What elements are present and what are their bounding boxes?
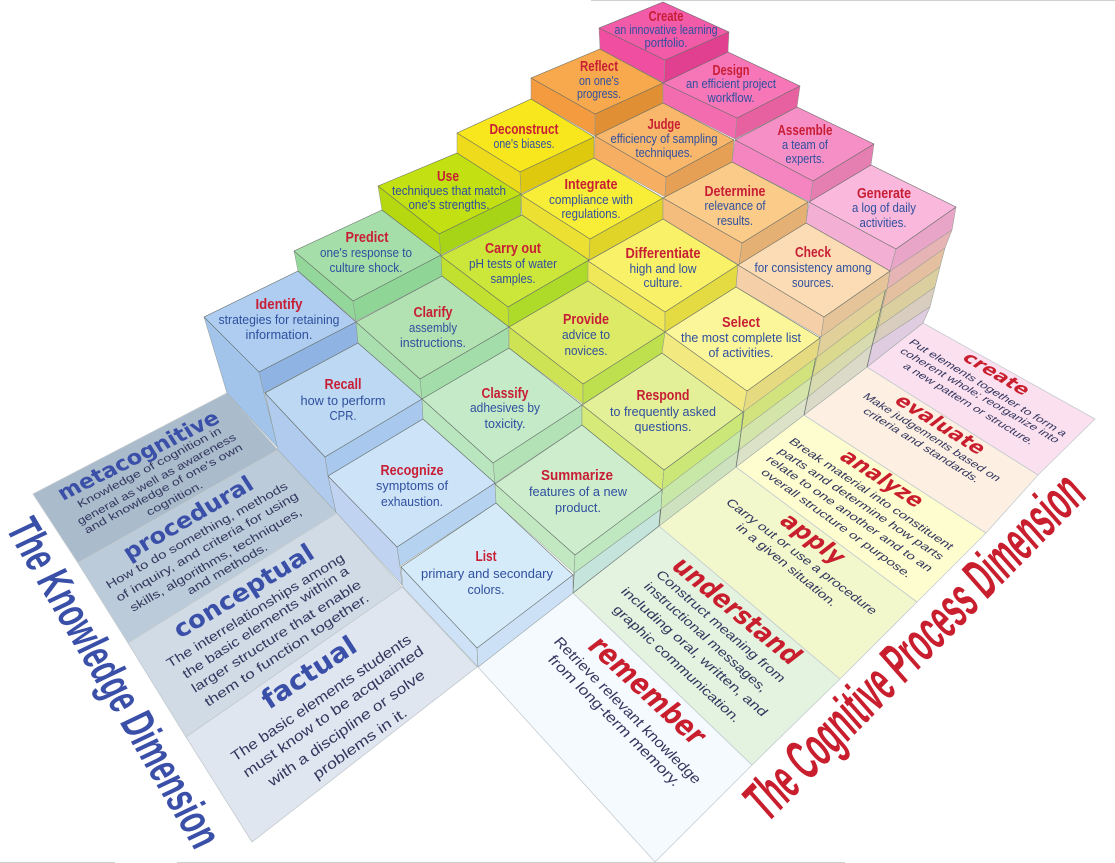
tile: Clarify: Clarify xyxy=(414,305,452,321)
tile: Reflect: on one's xyxy=(579,74,619,88)
panel: procedural: procedural xyxy=(118,470,258,565)
tile: Create: Create xyxy=(648,9,684,25)
panel: evaluate xyxy=(804,367,1038,533)
tile: Provide: Provide xyxy=(563,312,609,328)
tile: Carry out xyxy=(441,215,589,327)
tile: Judge xyxy=(594,103,734,197)
tile: Carry out: pH tests of water xyxy=(469,257,557,271)
tile: Reflect: Reflect xyxy=(580,59,618,75)
panel: create xyxy=(867,323,1095,475)
panel: procedural: of inquiry, and criteria for using xyxy=(113,489,301,604)
panel: analyze: relate to one another and to an xyxy=(763,454,936,574)
panel: cognitive process levels xyxy=(478,323,1095,862)
tile: Provide: novices. xyxy=(564,344,608,358)
tile: Differentiate: culture. xyxy=(644,276,682,290)
tile: Generate xyxy=(806,165,956,271)
tile: List xyxy=(401,503,573,667)
tile: Deconstruct: Deconstruct xyxy=(490,122,559,138)
tile: Use: Use xyxy=(437,169,459,185)
panel: conceptual xyxy=(128,513,402,737)
panel: procedural xyxy=(78,450,337,643)
panel: metacognitive: cognition. xyxy=(144,480,205,518)
tile: Select: the most complete list xyxy=(681,331,802,345)
panel: procedural: How to do something, methods xyxy=(103,479,290,591)
panel: apply xyxy=(659,467,917,679)
tile: Determine: Determine xyxy=(704,184,766,200)
tile: Recall: CPR. xyxy=(330,409,356,423)
tile: Check: sources. xyxy=(792,276,834,290)
tile: Use: one's strengths. xyxy=(408,198,490,212)
tile: Integrate: compliance with xyxy=(549,193,633,207)
tile: Design xyxy=(663,52,800,139)
panel: understand: instructional messages, xyxy=(641,579,772,694)
tile: List: primary and secondary xyxy=(421,567,554,581)
tile: Carry out: samples. xyxy=(490,272,536,286)
panel: conceptual: The interrelationships among xyxy=(164,551,347,670)
panel: metacognitive: Knowledge of cognition in xyxy=(75,426,224,510)
tile: Create xyxy=(599,2,729,83)
panel: remember: Retrieve relevant knowledge xyxy=(550,634,704,787)
tile: Recall: Recall xyxy=(324,377,362,393)
tile: Classify: adhesives by xyxy=(470,401,541,415)
panel: apply: Carry out or use a procedure xyxy=(723,496,881,617)
tile: Select: Select xyxy=(722,315,760,331)
panel: factual: The basic elements students xyxy=(228,631,414,765)
panel: understand xyxy=(573,526,840,765)
tile: Clarify: instructions. xyxy=(400,336,466,350)
tile: Deconstruct: one's biases. xyxy=(494,137,554,151)
tile: Create: an innovative learning xyxy=(614,23,718,37)
tile: Determine: results. xyxy=(717,214,753,228)
tile: Provide: advice to xyxy=(562,328,610,342)
tile: Carry out: Carry out xyxy=(485,241,541,257)
tile: Predict: culture shock. xyxy=(330,261,402,275)
tile: Identify: strategies for retaining xyxy=(218,313,340,327)
panel: analyze: Break material into constituent xyxy=(786,436,958,552)
tile: Create: portfolio. xyxy=(644,36,688,50)
tile: Respond: to frequently asked xyxy=(610,405,716,419)
tile: Use xyxy=(378,153,521,255)
tile: Identify: information. xyxy=(246,328,312,342)
tile: Integrate: Integrate xyxy=(564,177,618,193)
panel: conceptual: the basic elements within a xyxy=(180,563,352,681)
panel: metacognitive xyxy=(33,393,278,563)
tile: Classify xyxy=(422,348,582,483)
panel: metacognitive: and knowledge of one's own xyxy=(82,442,245,536)
panel: factual: problems in it. xyxy=(310,704,410,783)
panel: analyze: analyze xyxy=(833,446,930,512)
tile: Integrate xyxy=(521,158,663,260)
tile: Recognize: symptoms of xyxy=(376,479,449,493)
panel: knowledge dimension levels xyxy=(33,393,477,842)
tile: Select xyxy=(662,287,820,412)
tile: Classify: toxicity. xyxy=(484,417,526,431)
tile: Check: Check xyxy=(795,245,832,261)
panel: apply: in a given situation. xyxy=(733,521,841,609)
tile: Differentiate: Differentiate xyxy=(626,246,700,262)
tile: Provide xyxy=(509,281,665,404)
tile: Assemble: a team of xyxy=(782,138,828,152)
tile: Respond: questions. xyxy=(634,420,692,434)
panel: understand: including oral, written, and xyxy=(618,584,772,719)
tile: Use: techniques that match xyxy=(392,184,506,198)
panel: understand: understand xyxy=(664,552,809,670)
panel: understand: Construct meaning from xyxy=(653,567,790,685)
tile: Deconstruct xyxy=(457,99,594,194)
tile: List: List xyxy=(476,549,497,565)
panel: conceptual: them to function together. xyxy=(202,590,372,709)
tile: Recognize xyxy=(328,419,496,585)
tile: Predict xyxy=(294,210,442,321)
panel: conceptual: conceptual xyxy=(168,538,320,644)
tile: Generate: a log of daily xyxy=(852,201,917,215)
stair column: lower bands below the right edge xyxy=(573,230,952,593)
tile: Design: workflow. xyxy=(707,91,754,105)
tile: Respond xyxy=(582,353,743,490)
tile: Summarize: features of a new xyxy=(529,485,628,499)
panel: conceptual: larger structure that enable xyxy=(189,577,364,695)
tile: Reflect xyxy=(531,49,663,136)
panel: analyze: parts and determine how parts xyxy=(775,446,948,562)
tile: Recall: how to perform xyxy=(300,394,386,408)
tile: Respond: Respond xyxy=(636,388,690,404)
tile: Reflect: progress. xyxy=(577,87,621,101)
tile: Classify: Classify xyxy=(482,386,528,402)
panel: apply: apply xyxy=(773,509,853,569)
tile: Select: of activities. xyxy=(708,346,774,360)
panel: remember: remember xyxy=(580,631,715,751)
tile: Assemble: experts. xyxy=(786,152,824,166)
panel: evaluate: criteria and standards. xyxy=(860,407,983,485)
tile: Judge: efficiency of sampling xyxy=(610,132,718,146)
panel: factual: factual xyxy=(256,630,362,715)
panel: analyze: overall structure or purpose. xyxy=(758,467,916,580)
tile: Clarify xyxy=(356,276,509,399)
panel: factual: with a discipline or solve xyxy=(264,667,428,791)
tile: Predict: one's response to xyxy=(320,246,412,260)
tile: Design: an efficient project xyxy=(686,77,776,91)
panel: factual: must know to be acquainted xyxy=(240,643,427,781)
tile: Integrate: regulations. xyxy=(562,207,620,221)
tile: Check xyxy=(736,223,890,337)
panel: metacognitive: general as well as awareness xyxy=(75,432,239,527)
tile: Identify: Identify xyxy=(256,297,302,313)
tile: Design: Design xyxy=(712,63,750,79)
panel: remember xyxy=(478,593,752,862)
panel: create: create xyxy=(957,349,1036,399)
tile: Summarize xyxy=(495,425,662,573)
panel: analyze xyxy=(736,415,986,602)
panel: create: Put elements together to form a xyxy=(906,338,1070,439)
panel: create: coherent whole; reorganize into xyxy=(897,347,1062,445)
tile: List: colors. xyxy=(468,583,504,597)
tile: Summarize: Summarize xyxy=(541,468,613,484)
tile: Generate: Generate xyxy=(857,186,911,202)
tile: Identify xyxy=(204,271,358,448)
panel: understand: graphic communication. xyxy=(610,602,745,725)
panel: create: a new pattern or structure. xyxy=(900,362,1037,447)
tile: Differentiate: high and low xyxy=(630,262,697,276)
panel: metacognitive: metacognitive xyxy=(52,405,224,505)
tile: Judge: Judge xyxy=(648,117,680,133)
panel: factual xyxy=(186,587,477,842)
tile: Assemble: Assemble xyxy=(778,123,832,139)
tile: Recall xyxy=(265,343,423,512)
tile: Generate: activities. xyxy=(860,216,906,230)
tile: Recognize: exhaustion. xyxy=(381,495,443,509)
tile: Determine xyxy=(663,162,808,265)
tile: Clarify: assembly xyxy=(409,321,458,335)
tile: Check: for consistency among xyxy=(754,261,872,275)
tile: Assemble xyxy=(732,107,874,202)
tile: Differentiate xyxy=(588,219,738,332)
panel: remember: from long-term memory. xyxy=(544,652,684,790)
panel: procedural: and methods. xyxy=(184,540,270,597)
panel: evaluate: evaluate xyxy=(889,390,993,458)
tile: Summarize: product. xyxy=(555,501,601,515)
panel: procedural: skills, algorithms, techniques, xyxy=(127,505,304,614)
tile: Judge: techniques. xyxy=(636,146,692,160)
tile: Determine: relevance of xyxy=(704,199,766,213)
panel: evaluate: Make judgements based on xyxy=(860,392,1003,484)
tile: Recognize: Recognize xyxy=(380,463,444,479)
tile: Predict: Predict xyxy=(346,230,389,246)
